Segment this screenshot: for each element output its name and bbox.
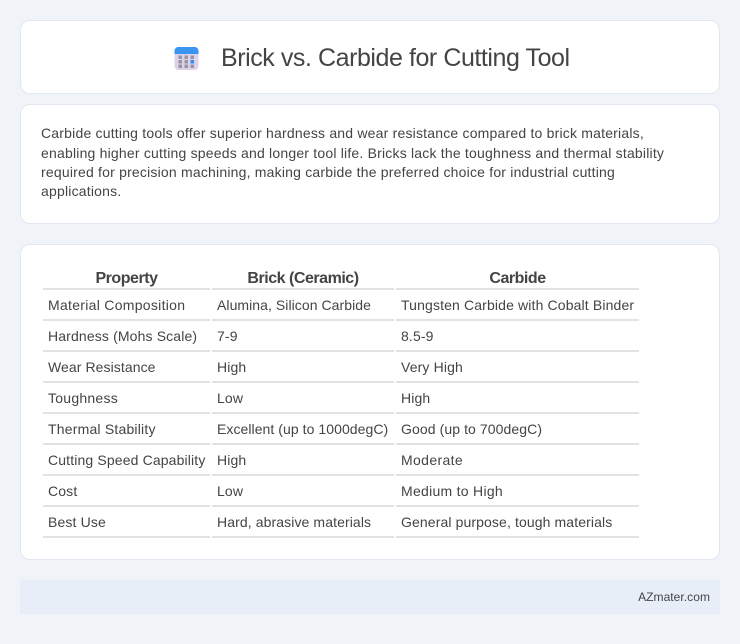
row: toughness: Toughness: [48, 390, 118, 406]
row: cost: Medium to High: [401, 483, 503, 499]
row: best use: [43, 514, 639, 538]
row: material composition: Material Composition: [48, 297, 185, 313]
row: toughness: Low: [217, 390, 243, 406]
row: toughness: High: [401, 390, 430, 406]
row: best use: General purpose, tough materials: [401, 514, 612, 530]
row: cutting speed: High: [217, 452, 246, 468]
row: hardness: 8.5-9: [401, 328, 434, 344]
row: cutting speed: Moderate: [401, 452, 463, 468]
row: cost: Cost: [48, 483, 77, 499]
row: cost: Low: [217, 483, 243, 499]
row: cutting speed: [43, 452, 639, 476]
table header row: [43, 270, 639, 290]
row: material composition: [43, 297, 639, 321]
row: cost: [43, 483, 639, 507]
row: hardness: Hardness (Mohs Scale): [48, 328, 197, 344]
row: best use: Hard, abrasive materials: [217, 514, 371, 530]
text block: description: [41, 125, 664, 199]
row: hardness: 7-9: [217, 328, 238, 344]
table header row: Carbide: [489, 270, 546, 287]
row: cutting speed: Cutting Speed Capability: [48, 452, 205, 468]
table header row: Property: [95, 270, 158, 287]
row: best use: Best Use: [48, 514, 106, 530]
icon: calendar: [174, 47, 198, 70]
row: material composition: Alumina, Silicon Carbide: [217, 297, 371, 313]
row: wear resistance: High: [217, 359, 246, 375]
panel: title card: [20, 20, 720, 94]
row: thermal stability: [43, 421, 639, 445]
text block: description: applications.: [41, 183, 121, 199]
text block: description: required for precision machining, making carbide the preferred choice for industrial cutting: [41, 164, 615, 180]
comparison table: [43, 270, 639, 538]
row: wear resistance: Very High: [401, 359, 463, 375]
text block: description: Carbide cutting tools offer superior hardness and wear resistance compared to brick materials,: [41, 125, 644, 141]
row: material composition: Tungsten Carbide with Cobalt Binder: [401, 297, 634, 313]
row: toughness: [43, 390, 639, 414]
row: wear resistance: Wear Resistance: [48, 359, 156, 375]
row: wear resistance: [43, 359, 639, 383]
table header row: Brick (Ceramic): [247, 270, 359, 287]
panel: comparison table: [20, 244, 720, 560]
footer source text: AZmater.com: [638, 590, 710, 604]
footer bar: [20, 580, 720, 614]
panel: description: [20, 104, 720, 224]
row: thermal stability: Thermal Stability: [48, 421, 156, 437]
row: thermal stability: Good (up to 700degC): [401, 421, 542, 437]
row: thermal stability: Excellent (up to 1000degC): [217, 421, 388, 437]
text block: description: enabling higher cutting speeds and longer tool life. Bricks lack the toughness and thermal stability: [41, 145, 664, 161]
row: hardness: [43, 328, 639, 352]
title: Brick vs. Carbide for Cutting Tool: [221, 44, 570, 72]
